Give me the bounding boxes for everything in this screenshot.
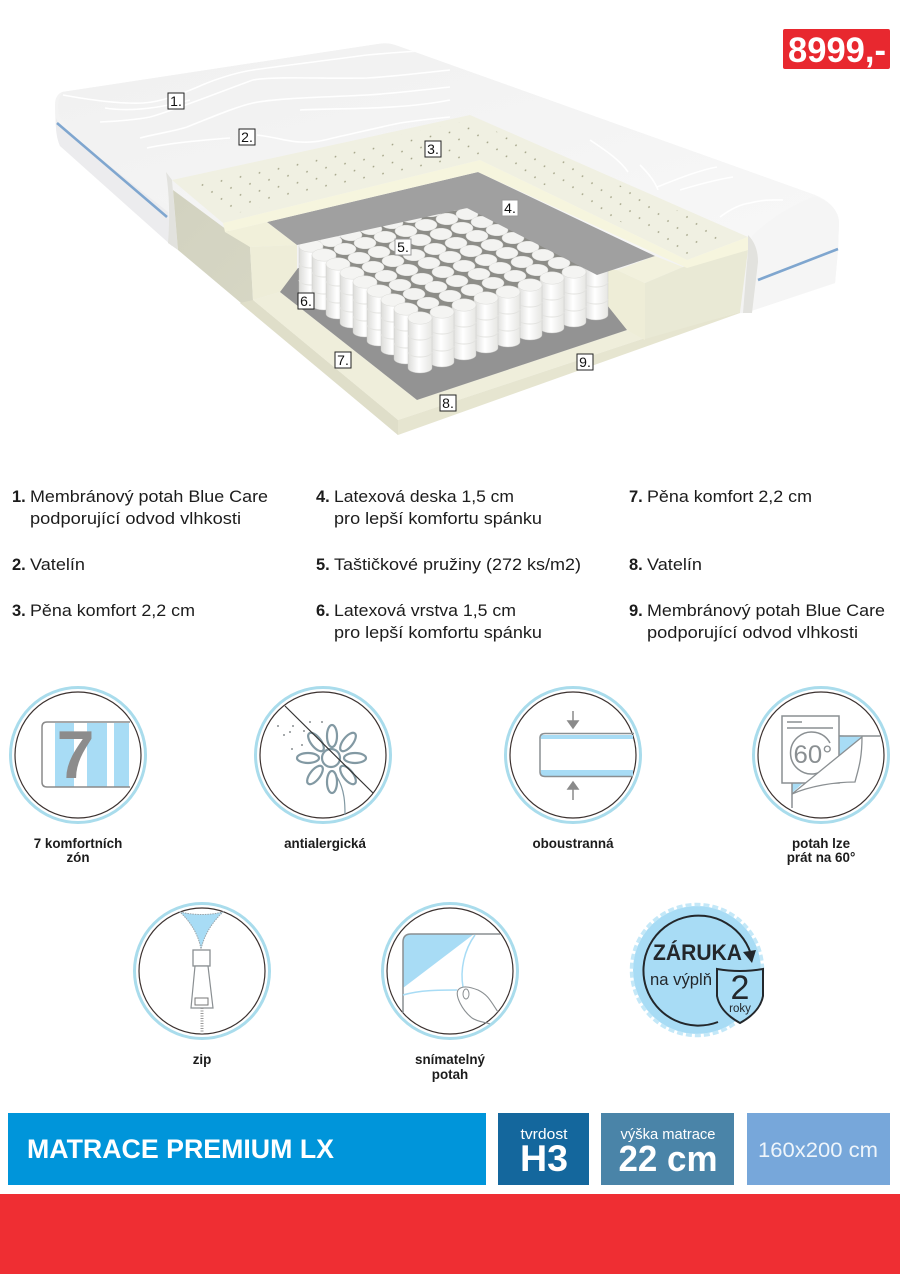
icon: removable cover	[382, 904, 518, 1082]
height box: výška matrace	[620, 1127, 716, 1143]
caption: potah	[432, 1067, 468, 1082]
mattress cover body	[55, 43, 839, 330]
item 7: Pěna komfort 2,2 cm	[647, 487, 812, 506]
caption: potah lze	[792, 836, 850, 851]
item 5: 5.	[316, 556, 330, 574]
item 8: Vatelín	[647, 555, 702, 574]
height box: 22 cm	[618, 1138, 718, 1179]
tag 8: 8.	[442, 395, 454, 411]
product name bar	[8, 1113, 486, 1185]
item 3: 3.	[12, 602, 26, 620]
gaps between springs	[312, 198, 600, 325]
left block inner face	[250, 245, 297, 300]
right block top	[617, 256, 683, 283]
size box: 160x200 cm	[758, 1139, 878, 1162]
icon: double-sided	[506, 688, 640, 851]
left block top	[225, 222, 297, 247]
item 4: Latexová deska 1,5 cm	[334, 487, 514, 506]
latex front edge	[223, 160, 748, 268]
item 6	[316, 601, 542, 642]
right block front	[645, 250, 748, 339]
cut edge right	[743, 235, 758, 313]
tag 4: 4.	[504, 200, 516, 216]
grey fabric top sheet	[267, 172, 655, 275]
icon: antiallergic flower	[256, 688, 390, 851]
item 4: 4.	[316, 488, 330, 506]
item 1: podporující odvod vlhkosti	[30, 509, 241, 528]
icon: washable at 60 degrees	[754, 688, 888, 865]
product name bar: MATRACE PREMIUM LX	[27, 1134, 334, 1164]
firmness box	[498, 1113, 589, 1185]
badge: warranty: ZÁRUKA	[653, 940, 742, 965]
item 4: pro lepší komfortu spánku	[334, 509, 542, 528]
item 3: Pěna komfort 2,2 cm	[30, 601, 195, 620]
tag 6: 6.	[300, 293, 312, 309]
item 8: 8.	[629, 556, 643, 574]
latex perforation dots	[178, 120, 738, 254]
callout tags	[168, 93, 593, 411]
caption: prát na 60°	[787, 850, 855, 865]
item 2: Vatelín	[30, 555, 85, 574]
cover left side face	[56, 118, 172, 246]
tag 2: 2.	[241, 129, 253, 145]
height box	[601, 1113, 734, 1185]
badge: warranty: roky	[729, 1003, 751, 1015]
item 6: 6.	[316, 602, 330, 620]
item 1: Membránový potah Blue Care	[30, 487, 268, 506]
item 9	[629, 601, 885, 642]
item 1	[12, 487, 268, 528]
item 9: podporující odvod vlhkosti	[647, 623, 858, 642]
badge: warranty: 2	[731, 969, 749, 1007]
tag 5: 5.	[397, 239, 409, 255]
slab front	[398, 312, 740, 435]
cover top surface	[58, 43, 838, 262]
tag 7: 7.	[337, 352, 349, 368]
blue trim right	[758, 249, 838, 280]
tag 3: 3.	[427, 141, 439, 157]
tag 1: 1.	[170, 93, 182, 109]
caption: zón	[66, 850, 90, 865]
red footer band	[0, 1194, 900, 1274]
right block inner face	[596, 268, 645, 340]
price tag: 8999,-	[788, 31, 886, 70]
caption: 7 komfortních	[34, 836, 122, 851]
item 5: Taštičkové pružiny (272 ks/m2)	[334, 555, 581, 574]
slab side lighter	[240, 300, 398, 435]
item 6: Latexová vrstva 1,5 cm	[334, 601, 516, 620]
edge springs	[299, 240, 608, 373]
caption: oboustranná	[532, 836, 614, 851]
slab top	[253, 292, 645, 420]
icon: 7 comfort zones: 7	[57, 717, 94, 793]
mattress cutaway illustration	[55, 43, 839, 435]
blue trim left	[57, 123, 167, 217]
item 4	[316, 487, 542, 528]
item 9: Membránový potah Blue Care	[647, 601, 885, 620]
firmness box: tvrdost	[520, 1127, 568, 1143]
latex top surface	[172, 115, 748, 260]
icon: washable at 60 degrees: 60°	[794, 741, 832, 769]
icon: 7 comfort zones	[10, 688, 146, 865]
icon: zip	[134, 904, 270, 1067]
quilting waves	[63, 50, 783, 217]
firmness box: H3	[520, 1138, 568, 1179]
specification list	[12, 487, 885, 642]
cut edge left	[166, 172, 178, 250]
tag 9: 9.	[579, 354, 591, 370]
caption: snímatelný	[415, 1052, 486, 1067]
caption: zip	[193, 1052, 211, 1067]
foam left side face	[173, 190, 398, 435]
spring field	[299, 198, 608, 373]
grey fabric bottom	[280, 268, 627, 400]
item 1: 1.	[12, 488, 26, 506]
item 6: pro lepší komfortu spánku	[334, 623, 542, 642]
cover right end	[745, 196, 839, 313]
item 2: 2.	[12, 556, 26, 574]
badge: warranty	[632, 904, 763, 1036]
item 7: 7.	[629, 488, 643, 506]
interior spring tops	[320, 199, 591, 309]
badge: warranty: na výplň	[650, 970, 712, 989]
size box	[747, 1113, 890, 1185]
caption: antialergická	[284, 836, 366, 851]
item 9: 9.	[629, 602, 643, 620]
